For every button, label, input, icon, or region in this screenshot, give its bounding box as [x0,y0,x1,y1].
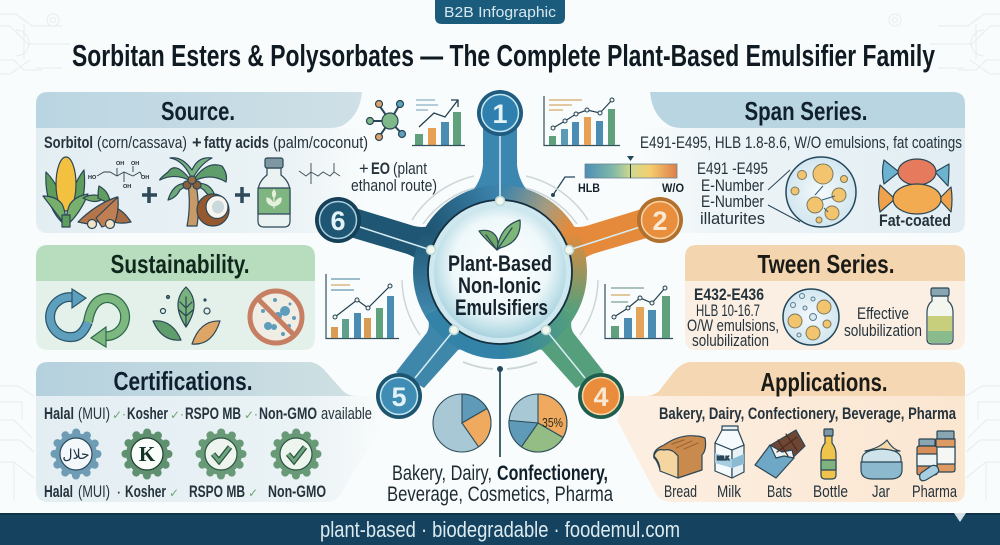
chemical structure: sorbitol [88,161,149,190]
text: effective solubilization [844,305,922,340]
text: tween labels: E432-E436 [694,286,764,304]
text: application labels: Milk [717,483,742,501]
badge: kosher [126,432,168,476]
chart: bars right of hub [605,284,673,338]
node 1 [477,90,523,136]
text: certification list: RSPO MB [185,405,241,423]
text: applications caption: Confectionery, [497,462,608,485]
icon: jar [861,440,902,479]
footer text: plant-based · biodegradable · foodemul.com [320,517,680,542]
chart: bars with arrow [412,100,465,146]
text: tween labels: O/W emulsions, [687,317,779,335]
divider pin [497,366,503,457]
text: certification list: Halal [44,405,74,423]
heading: certifications: Certifications. [114,366,252,396]
icon: W/O droplet diagram [768,157,856,227]
icon: bottle [258,158,290,227]
text: badge labels: Non-GMO [268,483,326,501]
text: span labels: E491 -E495 [697,160,768,178]
icon: milk carton: MILK [717,456,730,462]
text: badge labels: ✓ [169,486,179,500]
text: badge labels [44,483,326,501]
text: source description [44,134,368,152]
text: EO route: EO [371,160,390,178]
node 5 [376,373,422,419]
text: application labels: Jar [872,483,890,501]
icon: no microplastics [250,291,302,343]
central hub [315,90,683,419]
badge: kosher: K [139,442,156,466]
chemical structure: sorbitol: OH [116,161,124,167]
badge: non-gmo [274,432,318,476]
node 4 [578,373,624,419]
panel: applications [617,362,965,502]
text: applications caption: Beverage, Cosmetics, Pharma [387,483,613,506]
arm 1 [432,125,568,245]
hub title: Plant-Based [448,251,552,276]
icon: plus [142,187,157,203]
text: certification list: ✓· [112,408,126,422]
text: EO route: ethanol route) [351,177,437,195]
text: badge labels: RSPO MB [189,483,245,501]
icon: plus [235,187,250,203]
text: span labels [697,160,768,228]
text: certification list: Non-GMO [259,405,317,423]
chemical structure: sorbitol: OH [141,175,149,181]
icon: cassava [78,186,131,228]
chart: HLB scale [551,156,684,197]
text: applications caption: Bakery, Dairy, [392,462,492,485]
node 5: 5 [391,382,407,412]
chemical structure: sorbitol: HO [88,175,97,181]
text: EO route: + [359,160,369,178]
text: application labels: Bats [767,483,792,501]
footer bar [0,513,1000,545]
heading: span series: Span Series. [744,96,868,126]
hub title: Emulsifiers [455,295,548,320]
chemical structure: sorbitol: OH [123,184,131,190]
hub title [448,251,552,320]
icon: hub leaves [479,220,520,250]
chart: bars left of hub [326,274,399,338]
badge: halal [54,432,98,476]
text: badge labels: Kosher [125,483,166,501]
chemical structure: ester [299,163,340,184]
text: EO route: (plant [393,160,427,178]
text: source description: Sorbitol [44,134,93,152]
heading: tween series: Tween Series. [758,249,894,279]
text: tween labels [687,286,779,350]
icon: fat-coated candy [878,159,952,214]
arm 2 [556,208,650,278]
text: span labels: E-Number [701,193,764,211]
chart: HLB scale: W/O [662,181,684,195]
text: tween labels: solubilization [692,332,769,350]
text: source description: (corn/cassava) [97,134,187,152]
text: source description: fatty acids [204,134,269,152]
text: certification list [44,405,372,423]
arm 5 [396,305,474,388]
hub title: Non-Ionic [458,273,541,298]
icon: O/W droplet diagram [783,289,839,345]
icon: corn [43,157,88,227]
chart: bars with trend line top right [544,96,620,146]
icon: pharma bottles [917,431,955,481]
node 2: 2 [652,206,668,236]
pie chart: right: 35% [542,415,563,430]
text: certification list: (MUI) [78,405,110,423]
icon: chocolate bar [755,430,805,478]
icon: coconut [197,194,229,226]
chart: HLB scale: HLB [578,181,600,195]
icon: tween bottle [927,288,953,344]
hub ring [421,193,579,351]
text: badge labels: (MUI) [78,483,110,501]
text: span labels: illaturites [700,210,765,228]
text: application labels [664,483,958,501]
icon: milk carton [715,426,744,478]
text: tween labels: HLB 10-16.7 [696,302,760,320]
panel: tween series [685,245,965,350]
panel: certifications [36,362,388,502]
icon: molecule [366,100,406,140]
text: EO route [351,160,437,195]
icon: bottle [821,429,836,479]
pie chart: left [433,394,491,452]
heading: sustainability: Sustainability. [110,249,250,279]
badge: rspo [200,432,242,476]
node 1: 1 [492,99,508,129]
top badge: B2B Infographic [444,4,557,21]
heading: source: Source. [161,96,235,126]
text: badge labels: ✓ [248,486,258,500]
panel: span series [638,92,965,233]
text: badge labels: Halal [44,483,73,501]
top badge [435,0,565,24]
text: source description: + [192,134,202,152]
node 4: 4 [593,382,609,412]
chemical structure: sorbitol: OH [131,161,139,167]
text: effective solubilization: solubilization [844,322,922,340]
text: certification list: available [321,405,372,423]
pie chart: right [509,394,567,452]
icon: palm tree [160,158,226,226]
label: fat-coated: Fat-coated [879,212,951,230]
node 6 [315,197,361,243]
icon: circular arrows [50,289,125,347]
text: certification list: Kosher [127,405,168,423]
panel: source [36,92,437,233]
text: application labels: Bread [664,483,697,501]
heading: applications: Applications. [760,367,888,397]
text: source description: (palm/coconut) [273,134,368,152]
arm 4 [526,305,604,388]
text: effective solubilization: Effective [857,305,909,323]
badge: halal: حلال [62,447,90,463]
text: application labels: Pharma [912,483,958,501]
text: certification list: ✓· [244,408,258,422]
node 6: 6 [330,206,346,236]
text: badge labels: · [116,483,122,501]
text: applications caption [387,462,613,506]
text: certification list: ✓· [170,408,184,422]
icon: bread [654,436,706,478]
text: span labels: E-Number [701,177,764,195]
icon: leaves [153,287,220,344]
text: application labels: Bottle [813,483,848,501]
node 2 [637,197,683,243]
arm 6 [350,208,444,278]
panel: sustainability [36,245,315,350]
